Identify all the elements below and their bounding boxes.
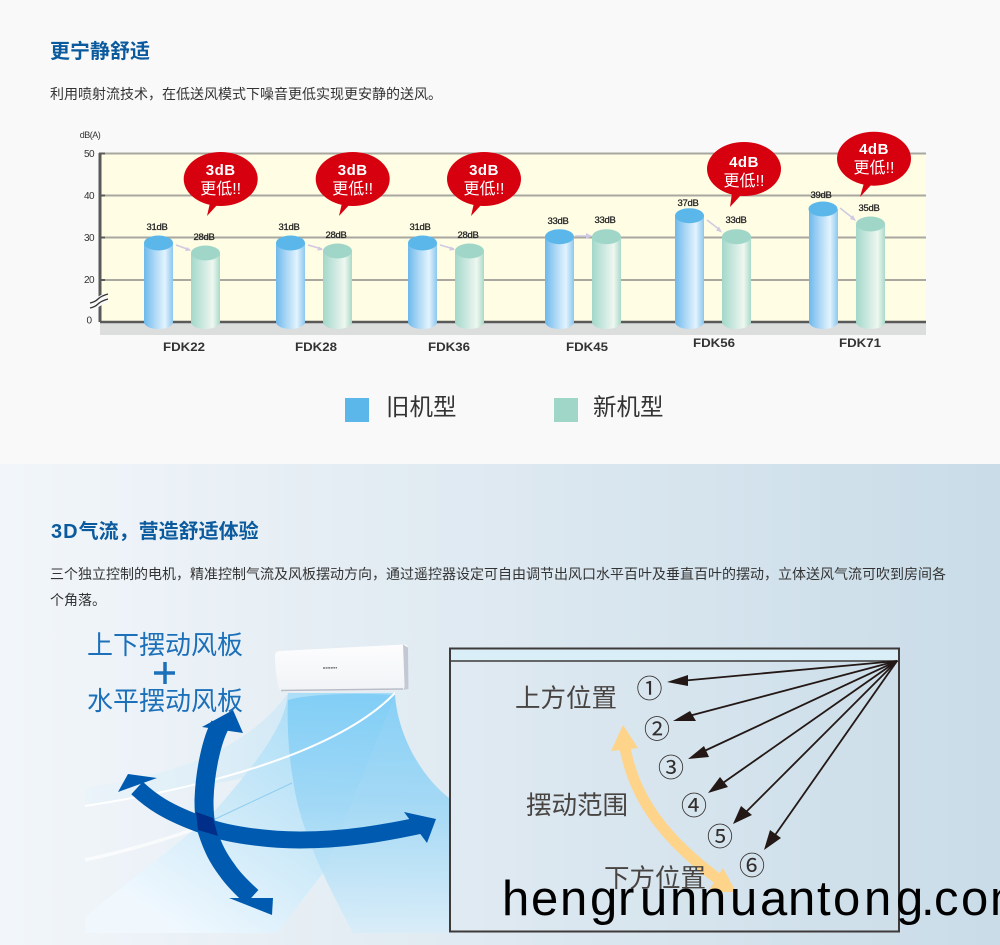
group: FDK71: 4dB bbox=[859, 141, 889, 158]
legend: new model bbox=[554, 394, 664, 422]
group: FDK28: 更低!! bbox=[332, 180, 373, 198]
group: FDK56: 更低!! bbox=[724, 172, 764, 190]
section background: 3D airflow bbox=[0, 464, 1000, 945]
y axis labels: 40 bbox=[84, 191, 95, 202]
group: FDK45: FDK45 bbox=[566, 340, 608, 354]
arrow: vertical swing bbox=[202, 710, 273, 915]
axis break mark bbox=[89, 293, 109, 310]
group: FDK71 bbox=[808, 132, 911, 350]
group: FDK56: FDK56 bbox=[693, 336, 735, 350]
group: FDK28: 31dB bbox=[278, 222, 300, 233]
group: FDK28 bbox=[276, 152, 390, 354]
legend: new model: 新机型 bbox=[593, 394, 664, 420]
label: swing range: 摆动范围 bbox=[526, 792, 628, 820]
room frame bbox=[450, 648, 899, 932]
group: FDK71: 39dB bbox=[810, 190, 832, 201]
group: FDK36: FDK36 bbox=[428, 340, 470, 354]
position numbers: ③ bbox=[658, 753, 684, 783]
position numbers: ⑥ bbox=[739, 851, 765, 881]
airflow direction arrows bbox=[667, 661, 897, 850]
group: FDK36: 31dB bbox=[410, 222, 430, 233]
text block: quiet description: 利用喷射流技术，在低送风模式下噪音更低实现更安静的送风。 bbox=[50, 86, 442, 102]
section background: quiet bbox=[0, 0, 1000, 464]
group: FDK56: 37dB bbox=[678, 198, 698, 209]
position numbers: ④ bbox=[681, 791, 707, 821]
y axis labels: 0 bbox=[86, 316, 92, 326]
y axis labels bbox=[80, 130, 101, 326]
group: FDK36: 3dB bbox=[469, 162, 499, 179]
air conditioner unit bbox=[275, 644, 408, 692]
group: FDK28: FDK28 bbox=[295, 340, 337, 354]
position numbers: ① bbox=[636, 674, 663, 704]
group: FDK36: 更低!! bbox=[464, 180, 504, 198]
title: deflector labels: 上下摆动风板 bbox=[87, 630, 243, 660]
group: FDK28: 28dB bbox=[326, 230, 346, 241]
text block: 3D airflow description bbox=[50, 566, 946, 608]
group: FDK22: 28dB bbox=[194, 232, 214, 243]
y axis labels: 30 bbox=[84, 233, 95, 244]
group: FDK22 bbox=[144, 152, 258, 354]
group: FDK45 bbox=[545, 215, 621, 354]
legend bbox=[345, 394, 664, 422]
position numbers bbox=[636, 674, 765, 881]
group: FDK22: 更低!! bbox=[200, 180, 241, 198]
group: FDK56 bbox=[675, 142, 781, 350]
group: FDK45: 33dB bbox=[594, 215, 616, 226]
group: FDK22: FDK22 bbox=[163, 340, 205, 354]
group: FDK71: 更低!! bbox=[854, 159, 894, 177]
group: FDK71: FDK71 bbox=[839, 336, 881, 350]
diagram: swing positions bbox=[450, 648, 899, 932]
title: deflector labels: 水平摆动风板 bbox=[87, 686, 243, 716]
y axis labels: dB(A) bbox=[80, 130, 101, 140]
white airflow curves bbox=[85, 693, 395, 860]
text block: 3D airflow description: 个角落。 bbox=[50, 592, 106, 608]
label: lower position: 下方位置 bbox=[604, 865, 706, 893]
arrow: swing range bbox=[611, 725, 736, 892]
chart plot area bbox=[99, 153, 926, 335]
bar chart: noise comparison bbox=[80, 130, 926, 354]
group: FDK28: 3dB bbox=[338, 162, 368, 179]
group: FDK22: 3dB bbox=[206, 162, 236, 179]
y axis labels: 50 bbox=[84, 149, 95, 160]
position numbers: ② bbox=[644, 714, 670, 744]
group: FDK36 bbox=[408, 152, 521, 354]
title: deflector labels bbox=[87, 630, 243, 716]
arrow: horizontal swing bbox=[118, 774, 436, 843]
text block: 3D airflow description: 三个独立控制的电机，精准控制气流及风板摆动方向，通过遥控器设定可自由调节出风口水平百叶及垂直百叶的摆动，立体送风气流可吹到房间各 bbox=[50, 566, 946, 582]
legend: old model bbox=[345, 394, 456, 422]
y axis labels: 20 bbox=[84, 275, 95, 286]
group: FDK56: 33dB bbox=[726, 215, 746, 226]
heading: 3D airflow: 3D气流，营造舒适体验 bbox=[51, 519, 259, 543]
group: FDK56: 4dB bbox=[729, 154, 759, 171]
group: FDK36: 28dB bbox=[458, 230, 478, 241]
heading: quiet comfort: 更宁静舒适 bbox=[50, 39, 150, 63]
group: FDK22: 31dB bbox=[146, 222, 168, 233]
airflow fans bbox=[85, 693, 449, 933]
illustration: air conditioner airflow bbox=[85, 630, 449, 933]
position numbers: ⑤ bbox=[707, 822, 733, 852]
legend: old model: 旧机型 bbox=[386, 394, 456, 420]
label: upper position: 上方位置 bbox=[515, 685, 617, 713]
group: FDK45: 33dB bbox=[548, 216, 568, 227]
group: FDK71: 35dB bbox=[858, 203, 880, 214]
